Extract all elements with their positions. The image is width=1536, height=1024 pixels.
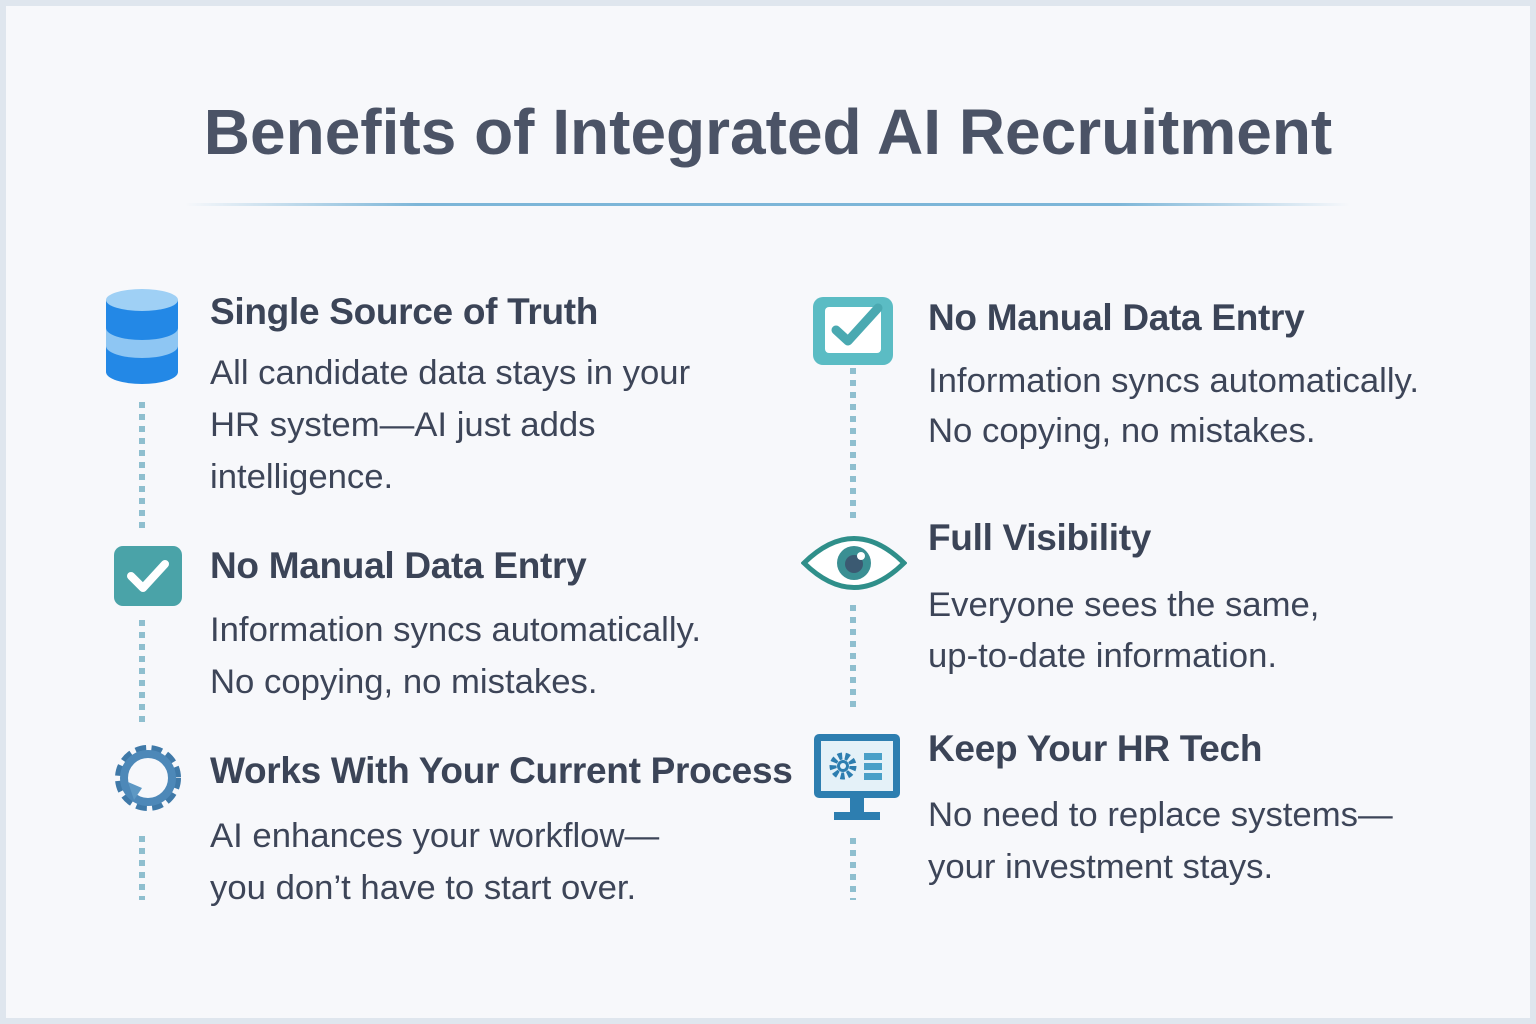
heading: keep hr tech: Keep Your HR Tech	[928, 728, 1262, 769]
text: full visibility	[928, 586, 1319, 675]
heading: works with: Works With Your Current Process	[210, 750, 793, 791]
text: keep hr tech	[928, 796, 1393, 886]
text: works with: you don’t have to start over.	[210, 869, 636, 907]
text: no manual left	[210, 611, 701, 701]
icon: checkbox right	[813, 297, 893, 365]
icon: checkbox left	[114, 546, 182, 606]
text: single source: intelligence.	[210, 458, 393, 496]
text: no manual right: No copying, no mistakes.	[928, 412, 1316, 450]
text: full visibility: Everyone sees the same,	[928, 586, 1319, 624]
icon: gear	[115, 745, 181, 811]
heading: no manual right: No Manual Data Entry	[928, 297, 1304, 338]
text: single source: HR system—AI just adds	[210, 406, 596, 444]
text: no manual left: No copying, no mistakes.	[210, 663, 598, 701]
heading: full visibility: Full Visibility	[928, 517, 1151, 558]
text: no manual right	[928, 362, 1419, 450]
title: Benefits of Integrated AI Recruitment	[204, 96, 1332, 168]
icon: eye	[801, 536, 907, 590]
text: full visibility: up-to-date information.	[928, 637, 1277, 675]
text: no manual right: Information syncs automatically.	[928, 362, 1419, 400]
heading: single source: Single Source of Truth	[210, 291, 598, 332]
icon: monitor	[814, 734, 900, 820]
text: single source	[210, 354, 690, 496]
text: no manual left: Information syncs automatically.	[210, 611, 701, 649]
heading: no manual left: No Manual Data Entry	[210, 545, 586, 586]
text: works with: AI enhances your workflow—	[210, 817, 659, 855]
text: works with	[210, 817, 660, 907]
text: single source: All candidate data stays in your	[210, 354, 690, 392]
text: keep hr tech: your investment stays.	[928, 848, 1273, 886]
icon: database	[106, 289, 178, 384]
text: keep hr tech: No need to replace systems—	[928, 796, 1393, 834]
